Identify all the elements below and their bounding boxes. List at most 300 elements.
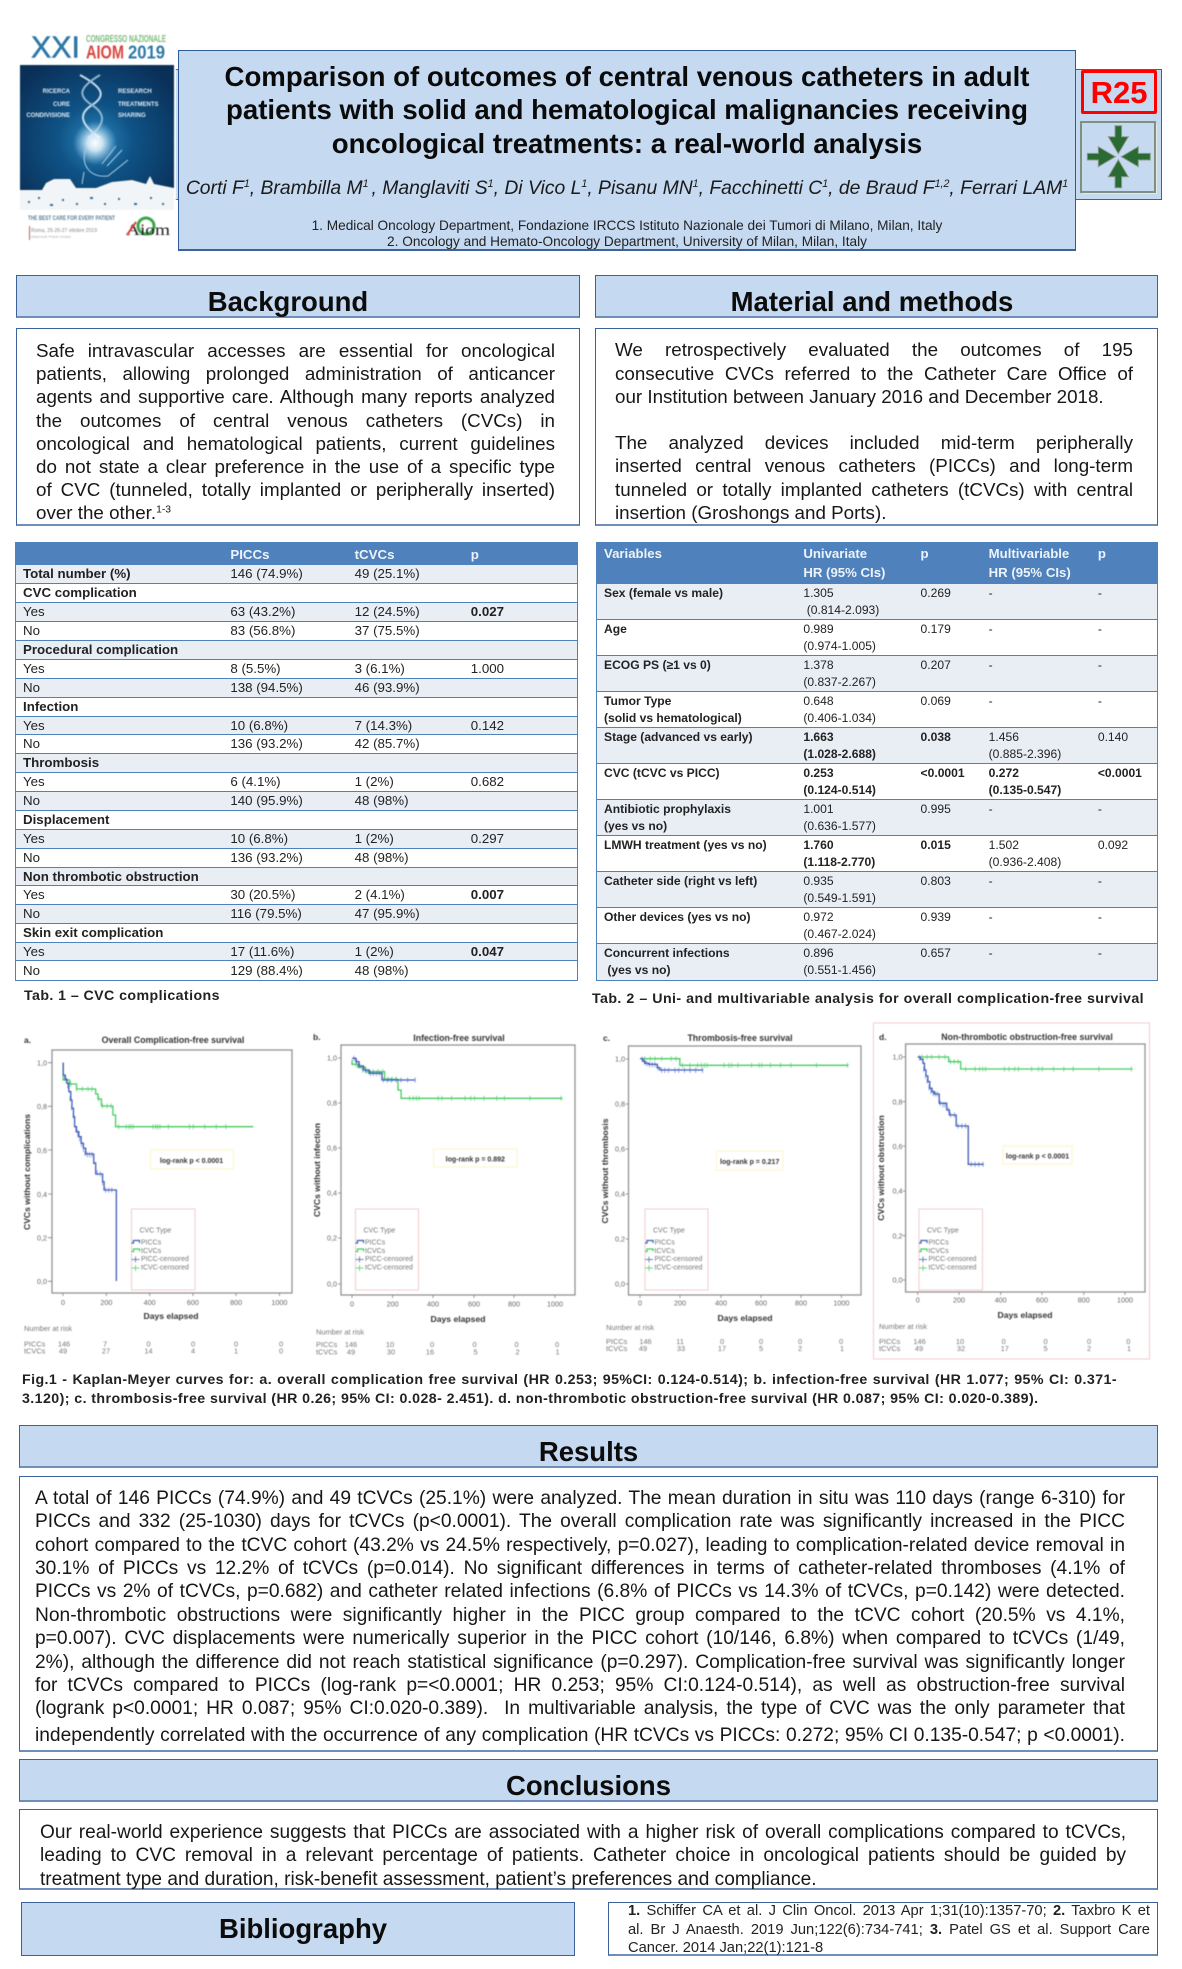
number at risk a <box>24 1324 283 1356</box>
background paragraph: oncological and hematological patients, current guidelines <box>36 433 555 454</box>
number at risk d: 2 <box>1087 1344 1091 1353</box>
number at risk c: 1 <box>840 1344 844 1353</box>
table 2: uni- and multivariable analysis: - <box>989 622 993 636</box>
chart a: overall complication-free survival <box>22 1035 292 1356</box>
chart a: overall complication-free survival: 400 <box>144 1298 156 1307</box>
number at risk d: 0 <box>1126 1337 1130 1346</box>
table 2: uni- and multivariable analysis: Age <box>604 622 627 636</box>
number at risk d: 0 <box>1087 1337 1091 1346</box>
title <box>225 60 1030 159</box>
results paragraph: cohort compared to the tCVC cohort (43.2% vs 24.5% respectively, p=0.027), leading to complication-related device removal in <box>35 1534 1125 1556</box>
conference logo: XXI AIOM 2019: RESEARCH <box>118 89 152 95</box>
methods paragraph: insertion (Groshongs and Ports). <box>615 502 886 523</box>
table 2: uni- and multivariable analysis: 0.939 <box>921 910 951 924</box>
table 2: uni- and multivariable analysis: <0.0001 <box>1098 766 1142 780</box>
table 1: CVC complications <box>15 542 578 981</box>
legend a: tCVCs <box>141 1248 162 1255</box>
background paragraph: patients, allowing prolonged administration of anticancer <box>36 363 555 384</box>
table 2: uni- and multivariable analysis: - <box>1098 658 1102 672</box>
references: al. Br J Anaesth. 2019 Jun;122(6):734-741; 3. Patel GS et al. Support Care <box>628 1922 1150 1938</box>
number at risk d: 1 <box>1127 1344 1131 1353</box>
table 2: uni- and multivariable analysis: 1.378 <box>803 658 834 672</box>
table 2: uni- and multivariable analysis: 0.648 <box>803 694 834 708</box>
table 2: uni- and multivariable analysis: - <box>1098 874 1102 888</box>
panel: results text <box>19 1476 1158 1752</box>
panel: background text <box>16 328 580 526</box>
chart a: overall complication-free survival: 1,0 <box>37 1058 47 1068</box>
legend b: PICC-censored <box>365 1256 413 1263</box>
table 1: CVC complications: No <box>23 623 40 638</box>
table 1: CVC complications: 129 (88.4%) <box>230 963 303 978</box>
chart d: non-thrombotic obstruction-free survival: 0,4 <box>892 1186 902 1196</box>
table 1: CVC complications: 10 (6.8%) <box>230 831 288 846</box>
chart b: infection-free survival: b. <box>313 1032 321 1042</box>
number at risk c: Number at risk <box>606 1323 654 1332</box>
table 1: CVC complications: 12 (24.5%) <box>355 604 420 619</box>
table 1: CVC complications: 7 (14.3%) <box>355 718 412 733</box>
results paragraph: 30.1% of PICCs vs 12.2% of tCVCs (p=0.014). No significant differences in terms of catheter-related thromboses (4.1% of <box>35 1558 1125 1579</box>
legend b: tCVC-censored <box>365 1264 413 1272</box>
table 2: uni- and multivariable analysis: - <box>1098 622 1102 636</box>
number at risk d: tCVCs <box>879 1344 901 1353</box>
background paragraph: of CVC (tunneled, totally implanted or peripherally inserted) <box>36 479 555 500</box>
legend c: tCVCs <box>654 1248 675 1255</box>
table 2: uni- and multivariable analysis: - <box>989 658 993 672</box>
results paragraph: (logrank p<0.0001; HR 0.087; 95% CI:0.020-0.389). In multivariable analysis, the type of CVC was the only parameter that <box>35 1698 1125 1719</box>
heading: results <box>19 1425 1158 1468</box>
table 1: CVC complications: No <box>23 963 40 978</box>
table 1: CVC complications: Yes <box>23 604 45 619</box>
table 1: CVC complications: Infection <box>23 699 78 714</box>
table 2: uni- and multivariable analysis: 0.972 <box>803 910 834 924</box>
table 1: CVC complications: No <box>23 906 40 921</box>
chart c: thrombosis-free survival: Thrombosis-free survival <box>687 1033 793 1043</box>
log-rank label d: log-rank p < 0.0001 <box>1006 1154 1069 1160</box>
table 2: uni- and multivariable analysis: 0.092 <box>1098 838 1128 852</box>
log-rank label a: log-rank p < 0.0001 <box>160 1158 223 1165</box>
table 2: uni- and multivariable analysis: 0.935 <box>803 874 834 888</box>
number at risk c: 2 <box>798 1344 802 1353</box>
number at risk b: 10 <box>386 1340 394 1349</box>
chart a: overall complication-free survival: 200 <box>100 1298 112 1307</box>
legend c: PICCs <box>654 1240 675 1246</box>
number at risk c: 0 <box>720 1337 724 1346</box>
table 1: CVC complications: Yes <box>23 831 45 846</box>
chart c: thrombosis-free survival: 0,8 <box>615 1100 625 1108</box>
legend d: CVC Type <box>927 1228 959 1234</box>
conference logo: XXI AIOM 2019: Aiom <box>126 222 171 239</box>
table 2: uni- and multivariable analysis: Univariate <box>803 546 867 561</box>
table 1: CVC complications: 140 (95.9%) <box>230 793 303 808</box>
conference logo: XXI AIOM 2019: RICERCA <box>43 89 71 95</box>
log-rank label b <box>434 1149 517 1167</box>
conclusions paragraph: Our real-world experience suggests that PICCs are associated with a higher risk of overall complications compared to tCVCs, <box>40 1822 1126 1843</box>
icon: four arrows pointing to centre <box>1080 121 1157 194</box>
number at risk c: 0 <box>759 1337 763 1346</box>
heading: background: Background <box>208 286 368 317</box>
methods paragraph: tunneled or totally implanted catheters (tCVCs) with central <box>615 479 1133 500</box>
number at risk a: 0 <box>146 1340 151 1348</box>
conference logo: XXI AIOM 2019: THE BEST CARE FOR EVERY PATIENT <box>28 215 115 222</box>
table 1: CVC complications: 63 (43.2%) <box>230 604 295 619</box>
chart c: thrombosis-free survival: 200 <box>674 1298 686 1308</box>
number at risk d: Number at risk <box>879 1322 927 1331</box>
table 1: CVC complications: 0.007 <box>471 887 504 902</box>
number at risk b: 0 <box>430 1340 434 1349</box>
number at risk c: 33 <box>677 1344 685 1353</box>
number at risk c: 0 <box>798 1337 802 1346</box>
panel: methods text <box>595 328 1158 526</box>
caption: table 2: Tab. 2 – Uni- and multivariable analysis for overall complication-free survival <box>592 991 1144 1007</box>
legend b: CVC Type <box>364 1228 395 1234</box>
number at risk c: 0 <box>839 1337 843 1346</box>
legend d <box>919 1209 982 1290</box>
chart b: infection-free survival: 0,2 <box>327 1234 337 1242</box>
chart a: overall complication-free survival: Overall Complication-free survival <box>102 1035 244 1045</box>
heading: results: Results <box>539 1436 638 1467</box>
table 2: uni- and multivariable analysis: 0.269 <box>921 586 951 600</box>
chart b: infection-free survival: 200 <box>387 1300 399 1308</box>
title: patients with solid and hematological malignancies receiving <box>226 94 1028 125</box>
conference logo: XXI AIOM 2019: CURE <box>53 102 70 108</box>
table 2: uni- and multivariable analysis: Concurrent infections <box>604 946 730 960</box>
caption: figure 1: Fig.1 - Kaplan-Meyer curves for: a. overall complication free survival (HR 0.253; 95%CI: 0.124-0.514); b. infection-free survival (HR 1.077; 95% CI: 0.371- <box>22 1372 1117 1388</box>
methods paragraph: We retrospectively evaluated the outcomes of 195 <box>615 339 1133 360</box>
chart b: infection-free survival: 0,0 <box>327 1280 337 1288</box>
heading: bibliography <box>21 1902 575 1956</box>
table 1: CVC complications: 3 (6.1%) <box>355 661 405 676</box>
heading: conclusions: Conclusions <box>506 1770 671 1801</box>
table 2: uni- and multivariable analysis: (0.837-2.267) <box>803 675 876 689</box>
table 2: uni- and multivariable analysis: 1.305 <box>803 586 834 600</box>
number at risk b: PICCs <box>316 1340 338 1349</box>
legend a <box>132 1209 195 1290</box>
table 1: CVC complications: 42 (85.7%) <box>355 736 420 751</box>
conference logo: XXI AIOM 2019: 2019 <box>128 42 165 62</box>
number at risk b: 1 <box>555 1348 560 1356</box>
results paragraph: 2%), although the difference did not reach statistical significance (p=0.297). Complication-free survival was significantly longer <box>35 1652 1125 1673</box>
number at risk a: Number at risk <box>24 1324 72 1333</box>
chart d: non-thrombotic obstruction-free survival: 0 <box>916 1296 920 1304</box>
table 1: CVC complications: 0.027 <box>471 604 504 619</box>
table 1: CVC complications: tCVCs <box>355 546 394 562</box>
table 1: CVC complications: Displacement <box>23 812 109 827</box>
number at risk d: PICCs <box>879 1337 901 1346</box>
number at risk a: 0 <box>234 1340 238 1348</box>
title: oncological treatments: a real-world analysis <box>332 128 922 158</box>
table 2: uni- and multivariable analysis: - <box>989 586 993 600</box>
chart a: overall complication-free survival: 0,8 <box>37 1102 47 1111</box>
table 2: uni- and multivariable analysis: p <box>1098 546 1106 561</box>
table 2: uni- and multivariable analysis: - <box>1098 694 1102 708</box>
background paragraph: the outcomes of central venous catheters (CVCs) in <box>36 410 555 431</box>
chart b: infection-free survival: 0,4 <box>327 1188 337 1198</box>
number at risk a: 0 <box>279 1340 283 1348</box>
number at risk c: 49 <box>639 1344 647 1353</box>
conference logo: XXI AIOM 2019 <box>19 30 177 240</box>
chart b: infection-free survival: 0,6 <box>327 1144 337 1152</box>
table 2: uni- and multivariable analysis: (solid vs hematological) <box>604 711 742 725</box>
table 2: uni- and multivariable analysis: <0.0001 <box>921 766 965 780</box>
number at risk b: Number at risk <box>316 1328 364 1336</box>
heading: material and methods: Material and methods <box>731 286 1013 317</box>
header backing band <box>150 69 1162 200</box>
table 2: uni- and multivariable analysis: 1.001 <box>803 802 834 816</box>
conference logo: XXI AIOM 2019: CONDIVISIONE <box>26 113 70 119</box>
table 1: CVC complications: 116 (79.5%) <box>230 906 302 921</box>
chart d: non-thrombotic obstruction-free survival: 1000 <box>1117 1296 1133 1304</box>
number at risk a: 0 <box>191 1340 195 1348</box>
table 2: uni- and multivariable analysis: 0.015 <box>921 838 951 852</box>
number at risk b: 16 <box>426 1348 434 1356</box>
table 2: uni- and multivariable analysis: - <box>1098 910 1102 924</box>
number at risk a: 27 <box>102 1346 110 1356</box>
number at risk a: 14 <box>144 1346 153 1356</box>
table 1: CVC complications: 2 (4.1%) <box>355 887 405 902</box>
title block <box>178 50 1076 251</box>
table 2: uni- and multivariable analysis: (0.467-2.024) <box>803 927 876 941</box>
chart c: thrombosis-free survival <box>600 1033 861 1353</box>
table 1: CVC complications: Yes <box>23 774 45 789</box>
affiliations <box>312 218 942 249</box>
number at risk b: 49 <box>347 1348 355 1356</box>
table 2: uni- and multivariable analysis: 1.760 <box>803 838 834 852</box>
table 1: CVC complications: 10 (6.8%) <box>230 718 288 733</box>
table 2: uni- and multivariable analysis: Stage (advanced vs early) <box>604 730 753 744</box>
number at risk a: PICCs <box>24 1340 46 1348</box>
legend c: CVC Type <box>653 1228 685 1234</box>
references <box>628 1903 1150 1956</box>
results paragraph: for tCVCs compared to PICCs (log-rank p=<0.0001; HR 0.253; 95% CI:0.124-0.514), as well as obstruction-free survival <box>35 1675 1125 1696</box>
chart d: non-thrombotic obstruction-free survival: CVCs without obstruction <box>876 1115 886 1221</box>
chart b: infection-free survival: 0,8 <box>327 1098 337 1108</box>
chart c: thrombosis-free survival: 0,0 <box>615 1280 625 1288</box>
number at risk d: 17 <box>1001 1344 1009 1353</box>
chart b: infection-free survival: Days elapsed <box>431 1314 485 1324</box>
table 1: CVC complications: No <box>23 793 40 808</box>
table 1: CVC complications: 0.047 <box>471 944 504 959</box>
figure 1: Kaplan-Meier curves <box>22 1022 1150 1360</box>
table 2: uni- and multivariable analysis: (1.028-2.688) <box>803 747 876 761</box>
chart c: thrombosis-free survival: 0,2 <box>615 1234 625 1244</box>
number at risk a: 7 <box>103 1340 107 1348</box>
conference logo: XXI AIOM 2019: SHARING <box>118 113 146 119</box>
affiliations: 2. Oncology and Hemato-Oncology Department, University of Milan, Milan, Italy <box>387 234 867 249</box>
number at risk d: 49 <box>915 1344 923 1353</box>
legend b <box>356 1209 418 1290</box>
number at risk c: 11 <box>676 1337 684 1346</box>
panel: bibliography text <box>608 1902 1158 1956</box>
chart b: infection-free survival: CVCs without infection <box>312 1123 322 1217</box>
table 1: CVC complications: Procedural complication <box>23 642 178 657</box>
legend d: PICCs <box>928 1240 949 1246</box>
conference logo: XXI AIOM 2019: XXI <box>31 30 80 64</box>
table 1: CVC complications: 136 (93.2%) <box>230 736 303 751</box>
chart a: overall complication-free survival: 600 <box>187 1298 199 1307</box>
table 1: CVC complications: 1 (2%) <box>355 774 394 789</box>
table 2: uni- and multivariable analysis: 1.456 <box>989 730 1019 744</box>
table 2: uni- and multivariable analysis: - <box>989 694 993 708</box>
table 1: CVC complications: 37 (75.5%) <box>355 623 420 638</box>
conclusions paragraph <box>40 1822 1126 1890</box>
legend c: tCVC-censored <box>654 1264 702 1272</box>
log-rank label b: log-rank p = 0.892 <box>446 1156 505 1164</box>
number at risk c: tCVCs <box>606 1344 628 1353</box>
table 1: CVC complications: 1 (2%) <box>355 831 394 846</box>
table 1: CVC complications: 1.000 <box>471 661 504 676</box>
log-rank label a <box>150 1150 234 1169</box>
table 2: uni- and multivariable analysis: p <box>921 546 929 561</box>
chart d: non-thrombotic obstruction-free survival: 800 <box>1078 1296 1090 1304</box>
table 2: uni- and multivariable analysis: Catheter side (right vs left) <box>604 874 757 888</box>
legend a: PICCs <box>141 1240 162 1246</box>
chart c: thrombosis-free survival: 0 <box>638 1298 642 1308</box>
legend c: PICC-censored <box>654 1256 702 1263</box>
table 1: CVC complications: 0.297 <box>471 831 504 846</box>
methods paragraph: The analyzed devices included mid-term peripherally <box>615 432 1133 453</box>
number at risk b: tCVCs <box>316 1348 338 1356</box>
conclusions paragraph: treatment type and duration, risk-benefit assessment, patient’s preferences and compliance. <box>40 1869 817 1890</box>
background paragraph <box>36 340 555 523</box>
chart d: non-thrombotic obstruction-free survival: 0,2 <box>892 1232 902 1240</box>
chart c: thrombosis-free survival: CVCs without thrombosis <box>600 1118 610 1224</box>
number at risk b: 0 <box>472 1340 477 1349</box>
log-rank label d <box>1003 1146 1072 1164</box>
results paragraph: PICCs and 332 (25-1030) days for tCVCs (p<0.0001). The overall complication rate was significantly increased in the PICC <box>35 1511 1125 1532</box>
legend b: tCVCs <box>365 1248 386 1255</box>
table 1: CVC complications: Non thrombotic obstruction <box>23 869 199 884</box>
chart b: infection-free survival <box>312 1032 575 1356</box>
results paragraph <box>35 1488 1125 1746</box>
table 2: uni- and multivariable analysis: 0.896 <box>803 946 834 960</box>
table 1: CVC complications: Thrombosis <box>23 755 99 770</box>
methods paragraph: our Institution between January 2016 and December 2018. <box>615 386 1104 407</box>
results paragraph: PICCs vs 2% of tCVCs, p=0.682) and catheter related infections (6.8% of PICCs vs 14.3% of tCVCs, p=0.142) were detected. <box>35 1581 1125 1602</box>
table 2: uni- and multivariable analysis: Sex (female vs male) <box>604 586 723 600</box>
table 1: CVC complications: No <box>23 680 40 695</box>
table 1: CVC complications: CVC complication <box>23 585 137 600</box>
table 2: uni- and multivariable analysis: 1.663 <box>803 730 834 744</box>
chart c: thrombosis-free survival: 0,6 <box>615 1144 625 1154</box>
caption: figure 1: 3.120); c. thrombosis-free survival (HR 0.26; 95% CI: 0.028- 2.451). d. non-thrombotic obstruction-free survival (HR 0.087; 95% CI: 0.020-0.389). <box>22 1391 1038 1407</box>
table 2: uni- and multivariable analysis: CVC (tCVC vs PICC) <box>604 766 720 780</box>
heading: bibliography: Bibliography <box>219 1913 387 1944</box>
number at risk b: 30 <box>387 1348 395 1356</box>
table 2: uni- and multivariable analysis: (1.118-2.770) <box>803 855 875 869</box>
conference logo: XXI AIOM 2019: Marriott Park Hotel <box>31 234 71 239</box>
number at risk b: 0 <box>515 1340 519 1349</box>
chart b: infection-free survival: 1000 <box>547 1300 563 1308</box>
table 1: CVC complications: 0.682 <box>471 774 504 789</box>
table 2: uni- and multivariable analysis: Antibiotic prophylaxis <box>604 802 731 816</box>
table 1: CVC complications: Total number (%) <box>23 566 131 581</box>
chart a: overall complication-free survival: 0 <box>61 1298 65 1307</box>
methods paragraph <box>615 339 1133 523</box>
table 2: uni- and multivariable analysis: Tumor Type <box>604 694 671 708</box>
table 2: uni- and multivariable analysis: 0.069 <box>921 694 951 708</box>
number at risk b: 5 <box>473 1348 478 1356</box>
legend a: PICC-censored <box>141 1256 189 1263</box>
chart d: non-thrombotic obstruction-free survival: 400 <box>995 1296 1007 1304</box>
table 2: uni- and multivariable analysis: (0.974-1.005) <box>803 639 876 653</box>
chart a: overall complication-free survival: 0,4 <box>37 1190 47 1199</box>
table 1: CVC complications: Skin exit complication <box>23 925 163 940</box>
table 1: CVC complications: 49 (25.1%) <box>355 566 420 581</box>
heading: material and methods <box>595 275 1158 318</box>
chart d: non-thrombotic obstruction-free survival: Days elapsed <box>998 1310 1052 1320</box>
log-rank label c <box>716 1151 783 1170</box>
chart a: overall complication-free survival: 800 <box>230 1298 242 1307</box>
table 1: CVC complications: 48 (98%) <box>355 963 409 978</box>
chart d: non-thrombotic obstruction-free survival: 200 <box>953 1296 965 1304</box>
chart b: infection-free survival: 0 <box>350 1300 354 1308</box>
number at risk a: 4 <box>191 1346 195 1356</box>
number at risk d: 0 <box>1002 1337 1006 1346</box>
number at risk a: 49 <box>59 1346 67 1356</box>
table 2: uni- and multivariable analysis: (0.124-0.514) <box>803 783 876 797</box>
chart a: overall complication-free survival: 0,6 <box>37 1146 47 1155</box>
table 1: CVC complications: Yes <box>23 887 45 902</box>
chart c: thrombosis-free survival: c. <box>603 1033 610 1043</box>
table 2: uni- and multivariable analysis: (0.936-2.408) <box>989 855 1061 869</box>
legend a: CVC Type <box>140 1228 171 1234</box>
number at risk d: 10 <box>956 1337 964 1346</box>
table 2: uni- and multivariable analysis: HR (95% CIs) <box>989 565 1071 580</box>
number at risk b: 2 <box>516 1348 520 1356</box>
table 1: CVC complications: Yes <box>23 944 45 959</box>
background paragraph: Safe intravascular accesses are essential for oncological <box>36 340 555 361</box>
chart b: infection-free survival: 1,0 <box>327 1054 337 1062</box>
table 2: uni- and multivariable analysis: ECOG PS (≥1 vs 0) <box>604 658 711 672</box>
results paragraph: independently correlated with the occurrence of any complication (HR tCVCs vs PICCs: 0.272; 95% CI 0.135-0.547; p <0.0001). <box>35 1725 1125 1746</box>
number at risk d: 5 <box>1044 1344 1048 1353</box>
table 1: CVC complications: 146 (74.9%) <box>230 566 303 581</box>
number at risk c: 146 <box>639 1337 652 1346</box>
chart a: overall complication-free survival: Days elapsed <box>144 1311 198 1321</box>
legend d: PICC-censored <box>928 1256 976 1263</box>
table 2: uni- and multivariable analysis: LMWH treatment (yes vs no) <box>604 838 767 852</box>
table 1: CVC complications: p <box>471 546 479 562</box>
number at risk b: 146 <box>345 1340 357 1349</box>
table 1: CVC complications: 83 (56.8%) <box>230 623 295 638</box>
conference logo: XXI AIOM 2019: AIOM <box>86 42 124 62</box>
table 1: CVC complications: 48 (98%) <box>355 850 409 865</box>
number at risk a: 1 <box>234 1346 238 1356</box>
table 2: uni- and multivariable analysis: - <box>989 802 993 816</box>
table 2: uni- and multivariable analysis: - <box>1098 586 1102 600</box>
chart a: overall complication-free survival: 1000 <box>271 1298 287 1307</box>
methods paragraph: consecutive CVCs referred to the Catheter Care Office of <box>615 363 1133 384</box>
table 2: uni- and multivariable analysis: (0.135-0.547) <box>989 783 1061 797</box>
conference logo: XXI AIOM 2019: TREATMENTS <box>118 102 159 108</box>
chart c: thrombosis-free survival: 400 <box>715 1298 727 1308</box>
badge: R25: R25 <box>1091 75 1147 110</box>
table 1: CVC complications: PICCs <box>230 546 270 562</box>
chart b: infection-free survival: 600 <box>468 1300 480 1308</box>
number at risk b <box>316 1328 560 1356</box>
table 2: uni- and multivariable analysis: 0.179 <box>921 622 951 636</box>
chart c: thrombosis-free survival: 0,4 <box>615 1190 625 1198</box>
affiliations: 1. Medical Oncology Department, Fondazione IRCCS Istituto Nazionale dei Tumori di Milano, Milan, Italy <box>312 218 942 233</box>
title: Comparison of outcomes of central venous catheters in adult <box>225 60 1029 92</box>
table 2: uni- and multivariable analysis: - <box>989 874 993 888</box>
results paragraph: Non-thrombotic obstructions were significantly higher in the PICC group compared to the tCVC cohort (20.5% vs 4.1%, <box>35 1605 1125 1626</box>
caption: figure 1 <box>22 1372 1117 1407</box>
table 2: uni- and multivariable analysis: 0.995 <box>921 802 951 816</box>
number at risk c: 5 <box>759 1344 763 1353</box>
table 1: CVC complications: 138 (94.5%) <box>230 680 303 695</box>
background paragraph: do not state a clear preference in the use of a specific type <box>36 456 555 477</box>
